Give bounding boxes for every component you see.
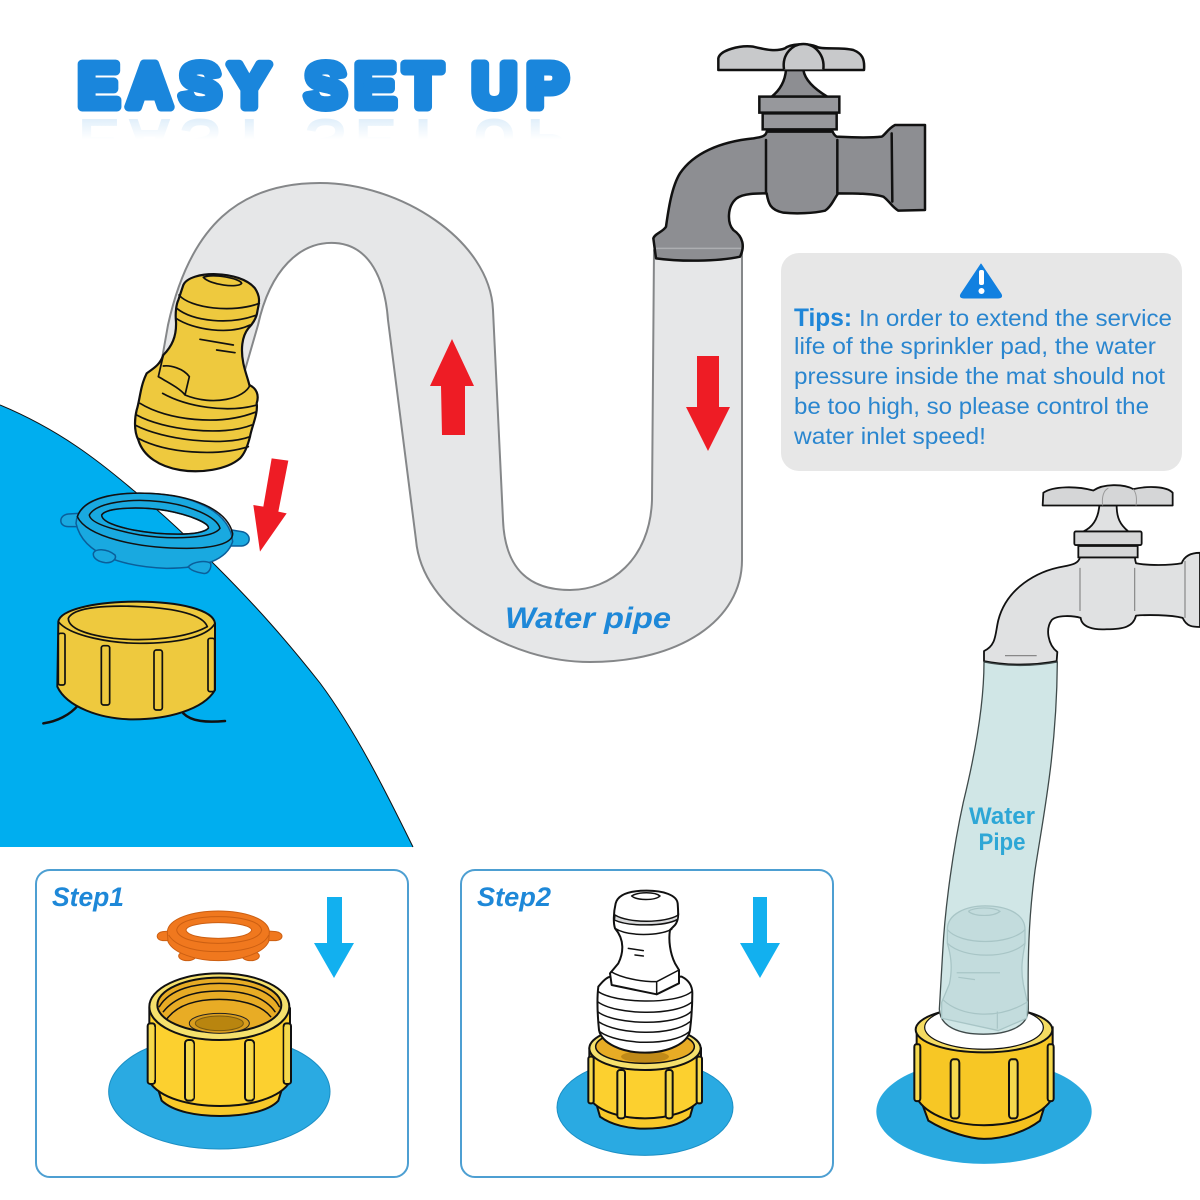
tips text: water inlet speed! xyxy=(793,423,986,449)
tips text xyxy=(793,304,1172,449)
arrow: blue down step 2 xyxy=(740,897,780,978)
arrow: red diagonal xyxy=(253,458,288,552)
icon: blue washer ring xyxy=(61,493,249,573)
title: easy set up xyxy=(78,52,568,174)
tips text: In order to extend the service xyxy=(859,305,1172,331)
label: water pipe right: Pipe xyxy=(978,829,1026,856)
blue mat background xyxy=(0,405,413,847)
panel: step 2 xyxy=(461,870,833,1177)
arrow: red down xyxy=(686,356,730,451)
arrow: blue down step 1 xyxy=(314,897,354,978)
icon: brass hose nut xyxy=(43,602,225,723)
water pipe hose xyxy=(160,183,742,662)
title: easy set up: UP xyxy=(472,105,568,174)
icon: brass quick connector xyxy=(135,274,259,471)
icon: light faucet with clear pipe xyxy=(876,485,1200,1164)
title: easy set up: EASY xyxy=(78,105,270,174)
icon: warning triangle xyxy=(960,264,1002,298)
ghost connector inside pipe xyxy=(942,906,1027,1031)
title: easy set up: SET xyxy=(305,105,442,174)
tips text: pressure inside the mat should not xyxy=(794,363,1166,389)
illustration: orange washer and nut xyxy=(109,911,330,1149)
label: water pipe: Water pipe xyxy=(505,602,671,635)
title: easy set up: UP xyxy=(472,52,568,121)
step 1 label: Step1 xyxy=(52,882,124,912)
tips panel xyxy=(781,253,1182,471)
icon: gray faucet xyxy=(653,44,925,261)
label: water pipe right: Water xyxy=(969,803,1035,830)
arrow: red up xyxy=(430,339,474,435)
tips text: Tips: xyxy=(794,304,852,332)
title: easy set up: SET xyxy=(305,52,442,121)
panel: step 1 xyxy=(36,870,408,1177)
tips text: be too high, so please control the xyxy=(794,393,1149,419)
illustration: white connector on nut xyxy=(557,891,733,1155)
label: water pipe right xyxy=(969,803,1035,856)
tips text: life of the sprinkler pad, the water xyxy=(794,333,1156,359)
yellow nut xyxy=(914,1006,1054,1139)
title: easy set up: EASY xyxy=(78,52,270,121)
step 2 label: Step2 xyxy=(477,882,551,912)
